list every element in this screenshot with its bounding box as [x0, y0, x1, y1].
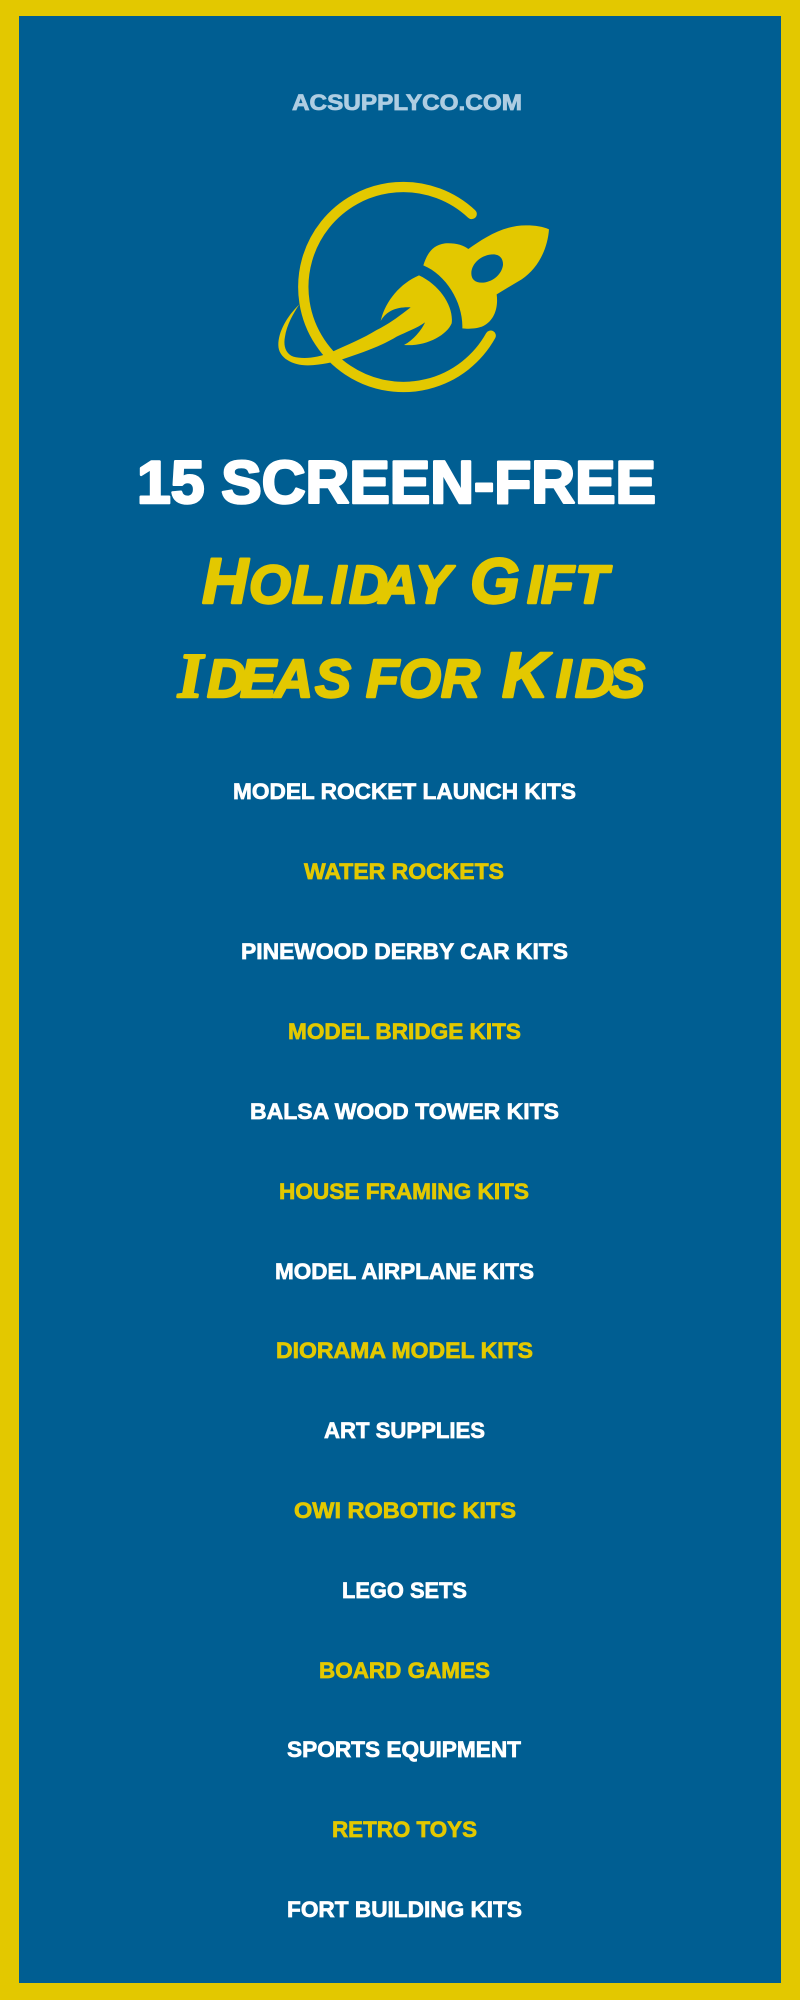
item 2: WATER ROCKETS	[304, 859, 504, 884]
title: 15 screen-free: 15 SCREEN-FREE	[137, 449, 656, 516]
item 15: FORT BUILDING KITS	[287, 1897, 522, 1922]
subtitle line: ideas for kids: DEAS	[207, 649, 351, 709]
gift ideas list	[233, 779, 576, 1922]
item 8: DIORAMA MODEL KITS	[276, 1338, 533, 1363]
icon: rocket orbiting a planet	[278, 187, 549, 387]
item 5: BALSA WOOD TOWER KITS	[250, 1099, 559, 1124]
item 7: MODEL AIRPLANE KITS	[275, 1259, 534, 1284]
item 11: LEGO SETS	[342, 1578, 467, 1603]
item 14: RETRO TOYS	[332, 1817, 477, 1842]
item 1: MODEL ROCKET LAUNCH KITS	[233, 779, 576, 804]
subtitle line: holiday gift: OLIDAY	[249, 555, 456, 615]
subtitle line: ideas for kids: IDS	[556, 649, 645, 709]
subtitle line: ideas for kids: K	[502, 639, 553, 711]
item 9: ART SUPPLIES	[324, 1418, 485, 1443]
item 10: OWI ROBOTIC KITS	[294, 1498, 516, 1523]
item 4: MODEL BRIDGE KITS	[288, 1019, 521, 1044]
subtitle line: ideas for kids: I	[177, 640, 205, 711]
item 12: BOARD GAMES	[319, 1658, 490, 1683]
subtitle line: holiday gift: H	[202, 545, 250, 617]
website label: ACSUPPLYCO.COM	[292, 90, 522, 115]
subtitle line: holiday gift: G	[470, 545, 520, 617]
subtitle line: holiday gift: IFT	[527, 555, 612, 615]
item 13: SPORTS EQUIPMENT	[287, 1737, 522, 1762]
item 6: HOUSE FRAMING KITS	[279, 1179, 529, 1204]
subtitle line: ideas for kids: FOR	[366, 649, 480, 709]
item 3: PINEWOOD DERBY CAR KITS	[241, 939, 568, 964]
